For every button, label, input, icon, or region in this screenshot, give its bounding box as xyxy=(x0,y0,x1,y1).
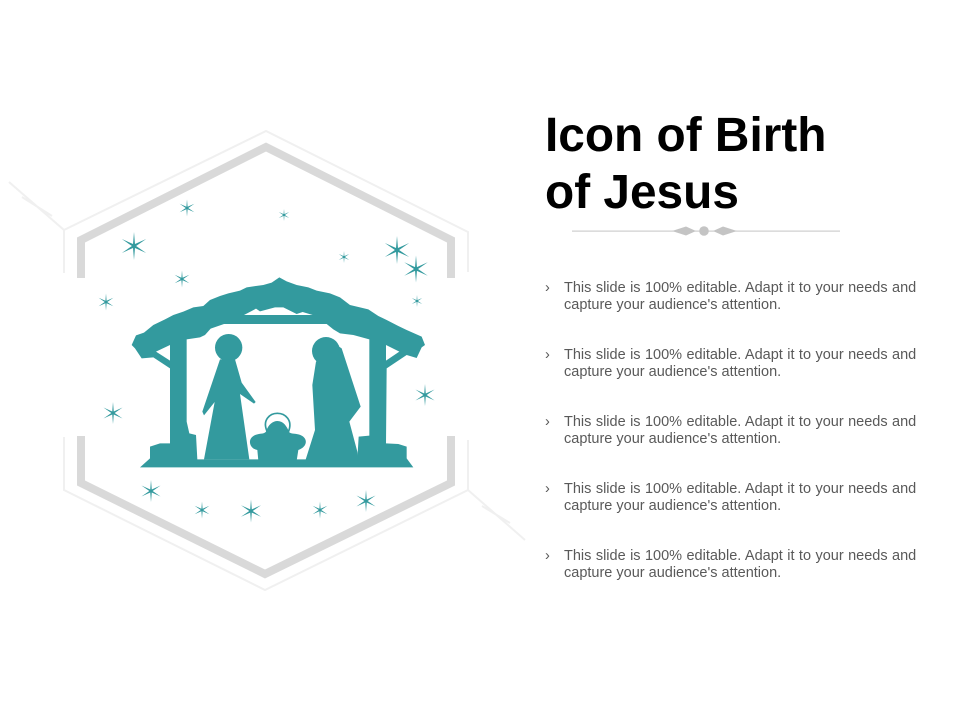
outer thin frame, bottom xyxy=(64,437,468,590)
bullet 4: › xyxy=(545,480,550,496)
bullet 4: This slide is 100% editable. Adapt it to your needs and xyxy=(564,480,916,496)
stable silhouette xyxy=(132,277,425,467)
bullet 3: › xyxy=(545,414,550,430)
ornamental divider xyxy=(572,226,840,236)
bullet 2 xyxy=(545,346,916,380)
inner thick frame, top xyxy=(81,147,451,278)
Joseph figure xyxy=(202,334,256,459)
bullet 5: This slide is 100% editable. Adapt it to your needs and xyxy=(564,548,916,564)
baby in manger xyxy=(250,413,306,461)
bullet 4: capture your audience's attention. xyxy=(564,498,781,514)
bullet 2: › xyxy=(545,346,550,362)
bullet 2: capture your audience's attention. xyxy=(564,364,781,380)
bullet 5 xyxy=(545,548,916,581)
roof opening xyxy=(244,307,313,315)
title: Icon of Birth xyxy=(545,109,826,162)
stable interior xyxy=(187,324,369,459)
bullet 5: › xyxy=(545,548,550,564)
left brace opening xyxy=(156,345,170,361)
outer thin frame, top xyxy=(64,131,468,273)
title: of Jesus xyxy=(545,166,739,219)
lower right accent lines xyxy=(468,490,525,540)
bullet 1: This slide is 100% editable. Adapt it to your needs and xyxy=(564,280,916,296)
stars xyxy=(99,200,435,522)
Mary figure xyxy=(305,337,361,461)
bullet 3 xyxy=(545,414,916,447)
nativity stable icon xyxy=(132,277,425,467)
bullet 3: This slide is 100% editable. Adapt it to your needs and xyxy=(564,414,916,430)
bullet 2: This slide is 100% editable. Adapt it to your needs and xyxy=(564,346,916,362)
bullet 1: capture your audience's attention. xyxy=(564,297,781,313)
right brace opening xyxy=(386,345,399,361)
bullet 4 xyxy=(545,480,916,514)
bullet 5: capture your audience's attention. xyxy=(564,565,781,581)
bullet 1: › xyxy=(545,280,550,296)
inner thick frame, bottom xyxy=(81,436,451,574)
title xyxy=(545,109,826,219)
hexagon frame xyxy=(9,131,525,590)
bullet 1 xyxy=(545,280,916,313)
bullet 3: capture your audience's attention. xyxy=(564,431,781,447)
upper left accent lines xyxy=(9,182,64,230)
